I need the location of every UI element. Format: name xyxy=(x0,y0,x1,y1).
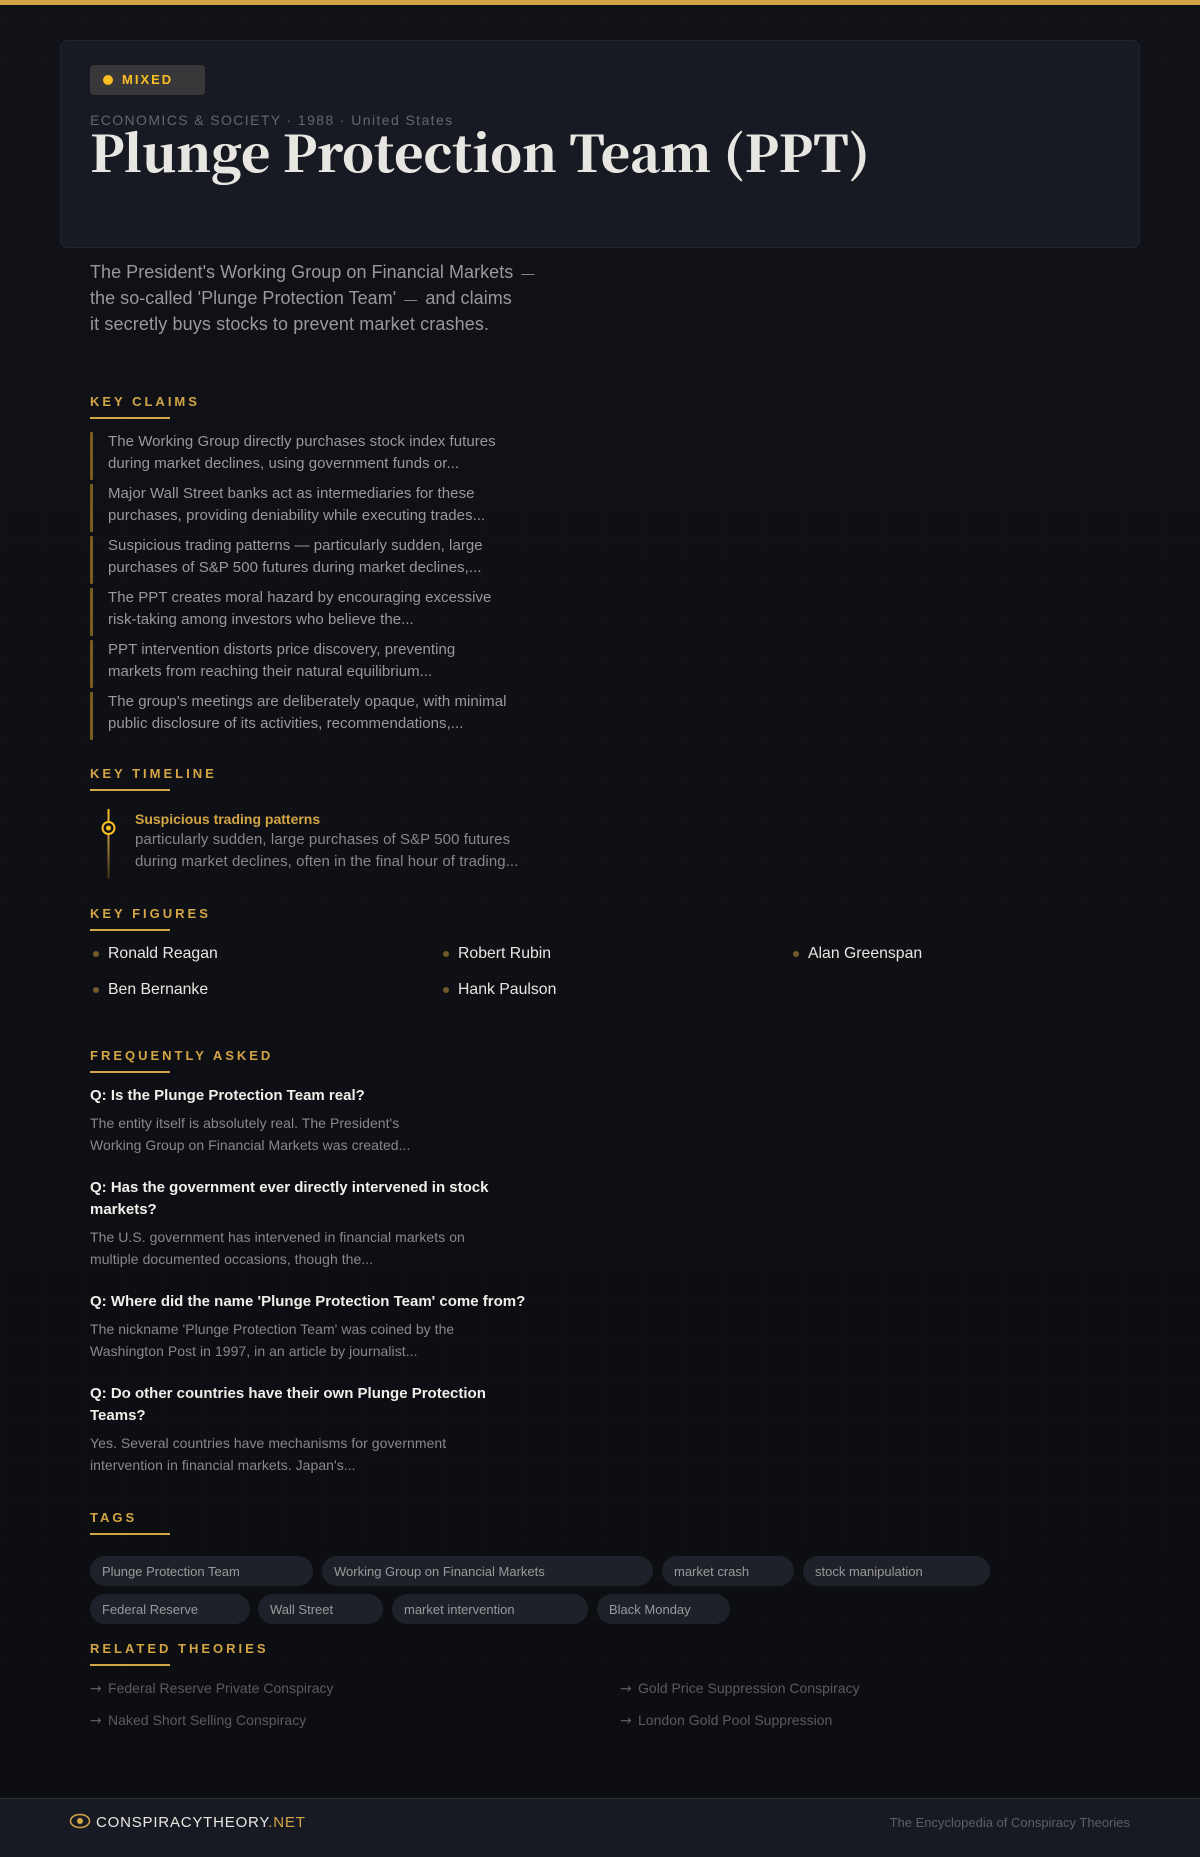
claim 5: markets from reaching their natural equilibrium... xyxy=(108,663,432,680)
summary text: the so-called 'Plunge Protection Team' — and claims xyxy=(90,288,512,308)
claim 4 xyxy=(90,588,491,636)
top accent bar xyxy=(0,0,1200,5)
icon: timeline marker xyxy=(102,809,116,879)
related link: London Gold Pool Suppression xyxy=(638,1712,832,1728)
figure: Ronald Reagan: Ronald Reagan xyxy=(108,945,218,962)
category and date meta: ECONOMICS & SOCIETY · 1988 · United States xyxy=(90,112,454,128)
faq answer 2: The U.S. government has intervened in financial markets on xyxy=(90,1229,465,1245)
faq question 4: Teams? xyxy=(90,1407,146,1424)
claim 5: PPT intervention distorts price discovery, preventing xyxy=(108,641,455,658)
claim 1: The Working Group directly purchases stock index futures xyxy=(108,433,496,450)
heading: tags: TAGS xyxy=(90,1510,137,1525)
timeline event text xyxy=(135,831,518,870)
tag: Wall Street xyxy=(270,1602,333,1617)
faq answer 2: multiple documented occasions, though the... xyxy=(90,1251,373,1267)
tag xyxy=(662,1556,794,1586)
tag: stock manipulation xyxy=(815,1564,923,1579)
timeline event text: particularly sudden, large purchases of S&P 500 futures xyxy=(135,831,510,848)
claim 1 xyxy=(90,432,496,480)
badge label: MIXED xyxy=(122,72,173,87)
tag xyxy=(322,1556,653,1586)
claim 6: The group's meetings are deliberately opaque, with minimal xyxy=(108,693,506,710)
faq question 3: Q: Where did the name 'Plunge Protection Team' come from? xyxy=(90,1293,525,1310)
faq question 4: Q: Do other countries have their own Plunge Protection xyxy=(90,1385,486,1402)
related link: → xyxy=(620,1681,632,1697)
summary text: The President's Working Group on Financial Markets — xyxy=(90,262,534,282)
claim 5 xyxy=(90,640,455,688)
section: key figures xyxy=(90,906,922,998)
figure: Robert Rubin: Robert Rubin xyxy=(458,945,551,962)
related link: Federal Reserve Private Conspiracy xyxy=(108,1680,334,1696)
claim 2 xyxy=(90,484,485,532)
claim 4: The PPT creates moral hazard by encouraging excessive xyxy=(108,589,491,606)
tag: Federal Reserve xyxy=(102,1602,198,1617)
heading: key claims: KEY CLAIMS xyxy=(90,394,200,409)
faq question 2: Q: Has the government ever directly intervened in stock xyxy=(90,1179,488,1196)
badge: mixed xyxy=(90,65,205,95)
faq answer 1: The entity itself is absolutely real. The President's xyxy=(90,1115,399,1131)
claim 4: risk-taking among investors who believe the... xyxy=(108,611,414,628)
tag xyxy=(392,1594,588,1624)
faq answer 2 xyxy=(90,1229,465,1267)
icon: eye logo xyxy=(70,1814,90,1828)
claim 3: purchases of S&P 500 futures during market declines,... xyxy=(108,559,482,576)
timeline event title: Suspicious trading patterns xyxy=(135,811,320,827)
site name: CONSPIRACYTHEORY.NET xyxy=(96,1814,306,1831)
tag xyxy=(258,1594,383,1624)
figure: Ben Bernanke: Ben Bernanke xyxy=(108,981,208,998)
heading: frequently asked: FREQUENTLY ASKED xyxy=(90,1048,273,1063)
tag xyxy=(803,1556,990,1586)
related link: → xyxy=(90,1713,102,1729)
faq answer 4: intervention in financial markets. Japan's... xyxy=(90,1457,356,1473)
section: related theories xyxy=(90,1641,860,1729)
claim 2: purchases, providing deniability while executing trades... xyxy=(108,507,485,524)
claim 6: public disclosure of its activities, recommendations,... xyxy=(108,715,463,732)
figure: Alan Greenspan: Alan Greenspan xyxy=(808,945,922,962)
faq answer 1 xyxy=(90,1115,410,1153)
section: frequently asked xyxy=(90,1048,525,1473)
timeline event text: during market declines, often in the final hour of trading... xyxy=(135,853,518,870)
heading: key figures: KEY FIGURES xyxy=(90,906,211,921)
section: tags xyxy=(90,1510,990,1624)
summary text xyxy=(90,262,534,334)
panel: header xyxy=(60,40,1140,248)
summary text: it secretly buys stocks to prevent market crashes. xyxy=(90,314,489,334)
claim 1: during market declines, using government funds or... xyxy=(108,455,459,472)
faq question 1: Q: Is the Plunge Protection Team real? xyxy=(90,1087,365,1104)
tag: market intervention xyxy=(404,1602,515,1617)
tag xyxy=(90,1556,313,1586)
tag: Working Group on Financial Markets xyxy=(334,1564,545,1579)
tag: Plunge Protection Team xyxy=(102,1564,240,1579)
faq question 4 xyxy=(90,1385,486,1424)
claim 6 xyxy=(90,692,506,740)
related link: Naked Short Selling Conspiracy xyxy=(108,1712,306,1728)
tag: Black Monday xyxy=(609,1602,691,1617)
faq question 2: markets? xyxy=(90,1201,157,1218)
badge dot xyxy=(103,75,113,85)
title: Plunge Protection Team (PPT) xyxy=(90,115,870,187)
faq answer 4: Yes. Several countries have mechanisms for government xyxy=(90,1435,446,1451)
section: key timeline xyxy=(90,766,518,879)
faq answer 1: Working Group on Financial Markets was created... xyxy=(90,1137,410,1153)
claim 3 xyxy=(90,536,483,584)
faq answer 3 xyxy=(90,1321,454,1359)
related link: → xyxy=(90,1681,102,1697)
claim 2: Major Wall Street banks act as intermediaries for these xyxy=(108,485,475,502)
faq answer 4 xyxy=(90,1435,446,1473)
faq answer 3: Washington Post in 1997, in an article by journalist... xyxy=(90,1343,418,1359)
tag xyxy=(597,1594,730,1624)
figure: Hank Paulson: Hank Paulson xyxy=(458,981,556,998)
heading: related theories: RELATED THEORIES xyxy=(90,1641,268,1656)
heading: key timeline: KEY TIMELINE xyxy=(90,766,217,781)
faq question 2 xyxy=(90,1179,488,1218)
tag: market crash xyxy=(674,1564,749,1579)
faq answer 3: The nickname 'Plunge Protection Team' was coined by the xyxy=(90,1321,454,1337)
related link: → xyxy=(620,1713,632,1729)
footer xyxy=(0,1798,1200,1857)
claim 3: Suspicious trading patterns — particularly sudden, large xyxy=(108,537,483,554)
footer tagline: The Encyclopedia of Conspiracy Theories xyxy=(890,1815,1130,1830)
tag xyxy=(90,1594,250,1624)
related link: Gold Price Suppression Conspiracy xyxy=(638,1680,860,1696)
section: key claims xyxy=(90,394,506,740)
